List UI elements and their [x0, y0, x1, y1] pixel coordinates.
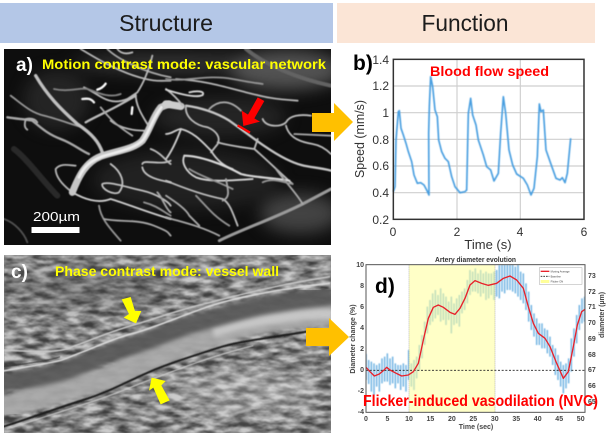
label d): d) — [375, 275, 395, 298]
arrow: structure to function, top — [312, 103, 353, 141]
legend: Baseline — [551, 275, 561, 279]
right y axis title: diameter (µm) — [599, 292, 606, 338]
x axis labels: 45 — [555, 416, 563, 423]
vessel walls — [3, 277, 330, 429]
speed trace — [393, 77, 571, 195]
right y axis labels: 70 — [588, 320, 596, 327]
legend: Moving Average — [551, 270, 570, 274]
y axis labels: 1 — [382, 106, 389, 120]
x axis labels — [364, 416, 585, 423]
vessel lumen — [0, 296, 333, 408]
blue raw diameter trace — [366, 265, 585, 395]
vessel network, right half — [166, 49, 331, 241]
flicker boundary lines — [409, 265, 495, 412]
chart caption: blood flow speed: Blood flow speed — [430, 63, 549, 79]
y axis labels: 0.2 — [372, 213, 389, 227]
legend — [539, 268, 582, 284]
grid lines — [393, 59, 584, 219]
x axis labels: 15 — [427, 416, 434, 423]
x axis labels: 40 — [534, 416, 542, 423]
right y axis labels: 69 — [588, 336, 596, 343]
y axis title: Speed (mm/s) — [352, 100, 367, 178]
left y axis labels: -2 — [358, 388, 364, 395]
x axis labels: 5 — [386, 416, 390, 423]
right y axis labels: 66 — [588, 383, 596, 390]
yellow arrow: lower wall — [149, 378, 170, 404]
x axis labels: 30 — [491, 416, 499, 423]
baseline — [366, 369, 585, 372]
left y axis labels: 0 — [360, 367, 364, 374]
panel a: motion contrast vascular network image — [4, 49, 343, 245]
left y axis labels: -4 — [358, 409, 364, 416]
left y axis labels — [356, 262, 364, 416]
chart title: Artery diameter evolution — [435, 255, 516, 264]
scale bar: 200 µm — [32, 212, 80, 233]
y axis labels — [372, 53, 389, 227]
x axis labels: 0 — [390, 225, 397, 239]
left y axis labels: 8 — [360, 283, 364, 290]
axes box — [366, 265, 585, 412]
heading: Function — [337, 3, 595, 43]
caption: phase contrast mode: Phase contrast mode: vessel wall — [55, 264, 279, 279]
y axis labels: 1.2 — [372, 79, 389, 93]
x axis labels: 25 — [469, 416, 477, 423]
legend: Flicker ON — [551, 280, 563, 284]
left y axis labels: 10 — [356, 262, 364, 269]
y axis labels: 0.4 — [372, 186, 389, 200]
right y axis labels: 67 — [588, 367, 596, 374]
x axis labels — [390, 225, 588, 239]
x axis labels: 2 — [454, 225, 461, 239]
x axis labels: 10 — [405, 416, 413, 423]
panel d: artery diameter chart — [350, 255, 606, 431]
caption: motion contrast mode: Motion contrast mode: vascular network — [42, 56, 326, 72]
x axis title: Time (sec) — [459, 424, 493, 431]
right y axis labels: 68 — [588, 352, 596, 359]
heading: Structure — [0, 3, 333, 43]
arrow: structure to function, bottom — [306, 318, 349, 356]
x axis labels: 20 — [448, 416, 456, 423]
panel c: phase contrast vessel wall image — [0, 255, 333, 433]
x axis labels: 6 — [581, 225, 588, 239]
moving average line — [366, 276, 585, 378]
right y axis labels: 73 — [588, 273, 596, 280]
flicker on shaded region — [409, 265, 495, 412]
yellow arrow: upper wall — [122, 297, 141, 323]
y axis labels: 0.8 — [372, 133, 389, 147]
y axis labels: 0.6 — [372, 159, 389, 173]
label a): a) — [16, 55, 33, 76]
left y axis labels: 2 — [360, 346, 364, 353]
vessel network, left half — [4, 49, 171, 242]
label c): c) — [11, 262, 28, 283]
right y axis labels: 65 — [588, 399, 596, 406]
label b): b) — [353, 52, 373, 75]
x axis labels: 50 — [577, 416, 585, 423]
heading: Function: Function — [422, 10, 508, 36]
x axis labels: 4 — [517, 225, 524, 239]
left y axis labels: 6 — [360, 304, 364, 311]
x axis labels: 35 — [512, 416, 520, 423]
y axis labels: 1.4 — [372, 53, 389, 67]
right y axis labels: 71 — [588, 304, 596, 311]
axes box — [393, 59, 584, 219]
panel b: blood flow speed chart — [352, 52, 588, 252]
left y axis title: Diameter change (%) — [350, 304, 357, 374]
left y axis labels: 4 — [360, 325, 364, 332]
red arrow: measurement site — [238, 97, 264, 133]
x axis labels: 0 — [364, 416, 368, 423]
heading: Structure: Structure — [119, 10, 213, 36]
scale bar: 200 µm: 200µm — [33, 209, 80, 224]
right y axis labels: 72 — [588, 289, 596, 296]
x axis title: Time (s) — [464, 237, 512, 252]
right y axis labels — [588, 273, 596, 406]
